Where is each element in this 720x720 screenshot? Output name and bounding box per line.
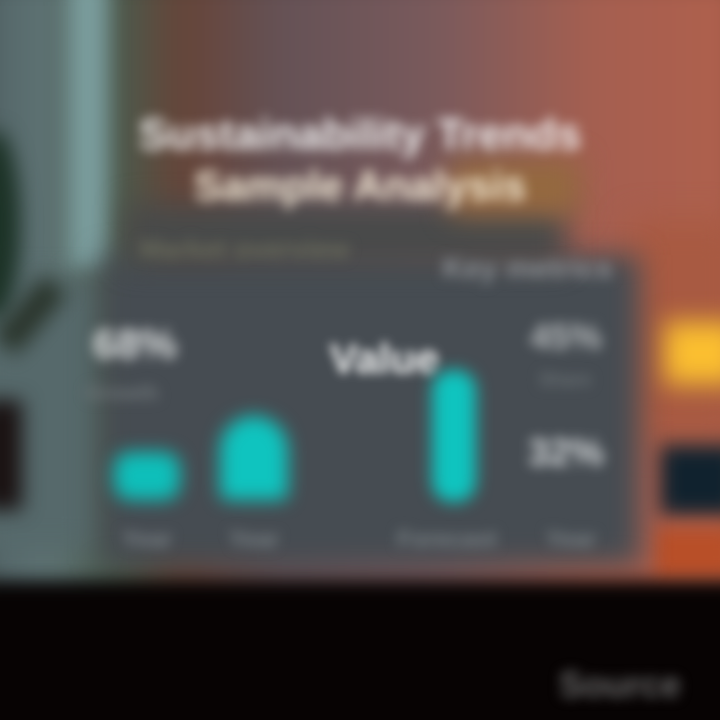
bar: second xyxy=(220,416,288,500)
title: Sustainability Trends xyxy=(139,110,581,159)
orange wall lower xyxy=(630,220,720,440)
stat note: right: Share xyxy=(539,370,591,391)
bar chart xyxy=(102,360,487,512)
orange shelf xyxy=(655,528,720,578)
dark object right xyxy=(660,445,720,515)
plant pot xyxy=(0,400,22,510)
axis label 1: Year xyxy=(122,526,172,553)
panel: upper board band xyxy=(125,205,565,265)
lamp glow xyxy=(664,322,720,384)
stat label: right lower: 32% xyxy=(528,432,604,474)
panel: dashboard board xyxy=(100,255,640,565)
axis label 4: Year xyxy=(546,526,596,553)
subtitle right: Key metrics xyxy=(442,252,613,285)
subtitle left: Market overview xyxy=(139,234,350,264)
lower left wall xyxy=(0,280,95,550)
stat label: centre: Value xyxy=(330,335,439,382)
bar: third xyxy=(432,370,476,502)
title: Sample Analysis xyxy=(194,162,526,209)
watermark: Source xyxy=(559,664,681,705)
warm title backing xyxy=(450,160,580,215)
axis label 2: Year xyxy=(229,526,279,553)
plant leaf xyxy=(0,275,67,355)
bar: first xyxy=(114,452,180,500)
table xyxy=(0,582,720,720)
stat label: left: 68% xyxy=(93,320,177,367)
axis label 3: Forecast xyxy=(397,526,497,553)
title xyxy=(134,110,587,216)
window column left xyxy=(68,0,108,270)
axis labels xyxy=(122,526,596,553)
plant xyxy=(0,130,20,320)
stat note: left: Growth xyxy=(85,382,159,405)
stat label: right top: 45% xyxy=(530,316,602,357)
